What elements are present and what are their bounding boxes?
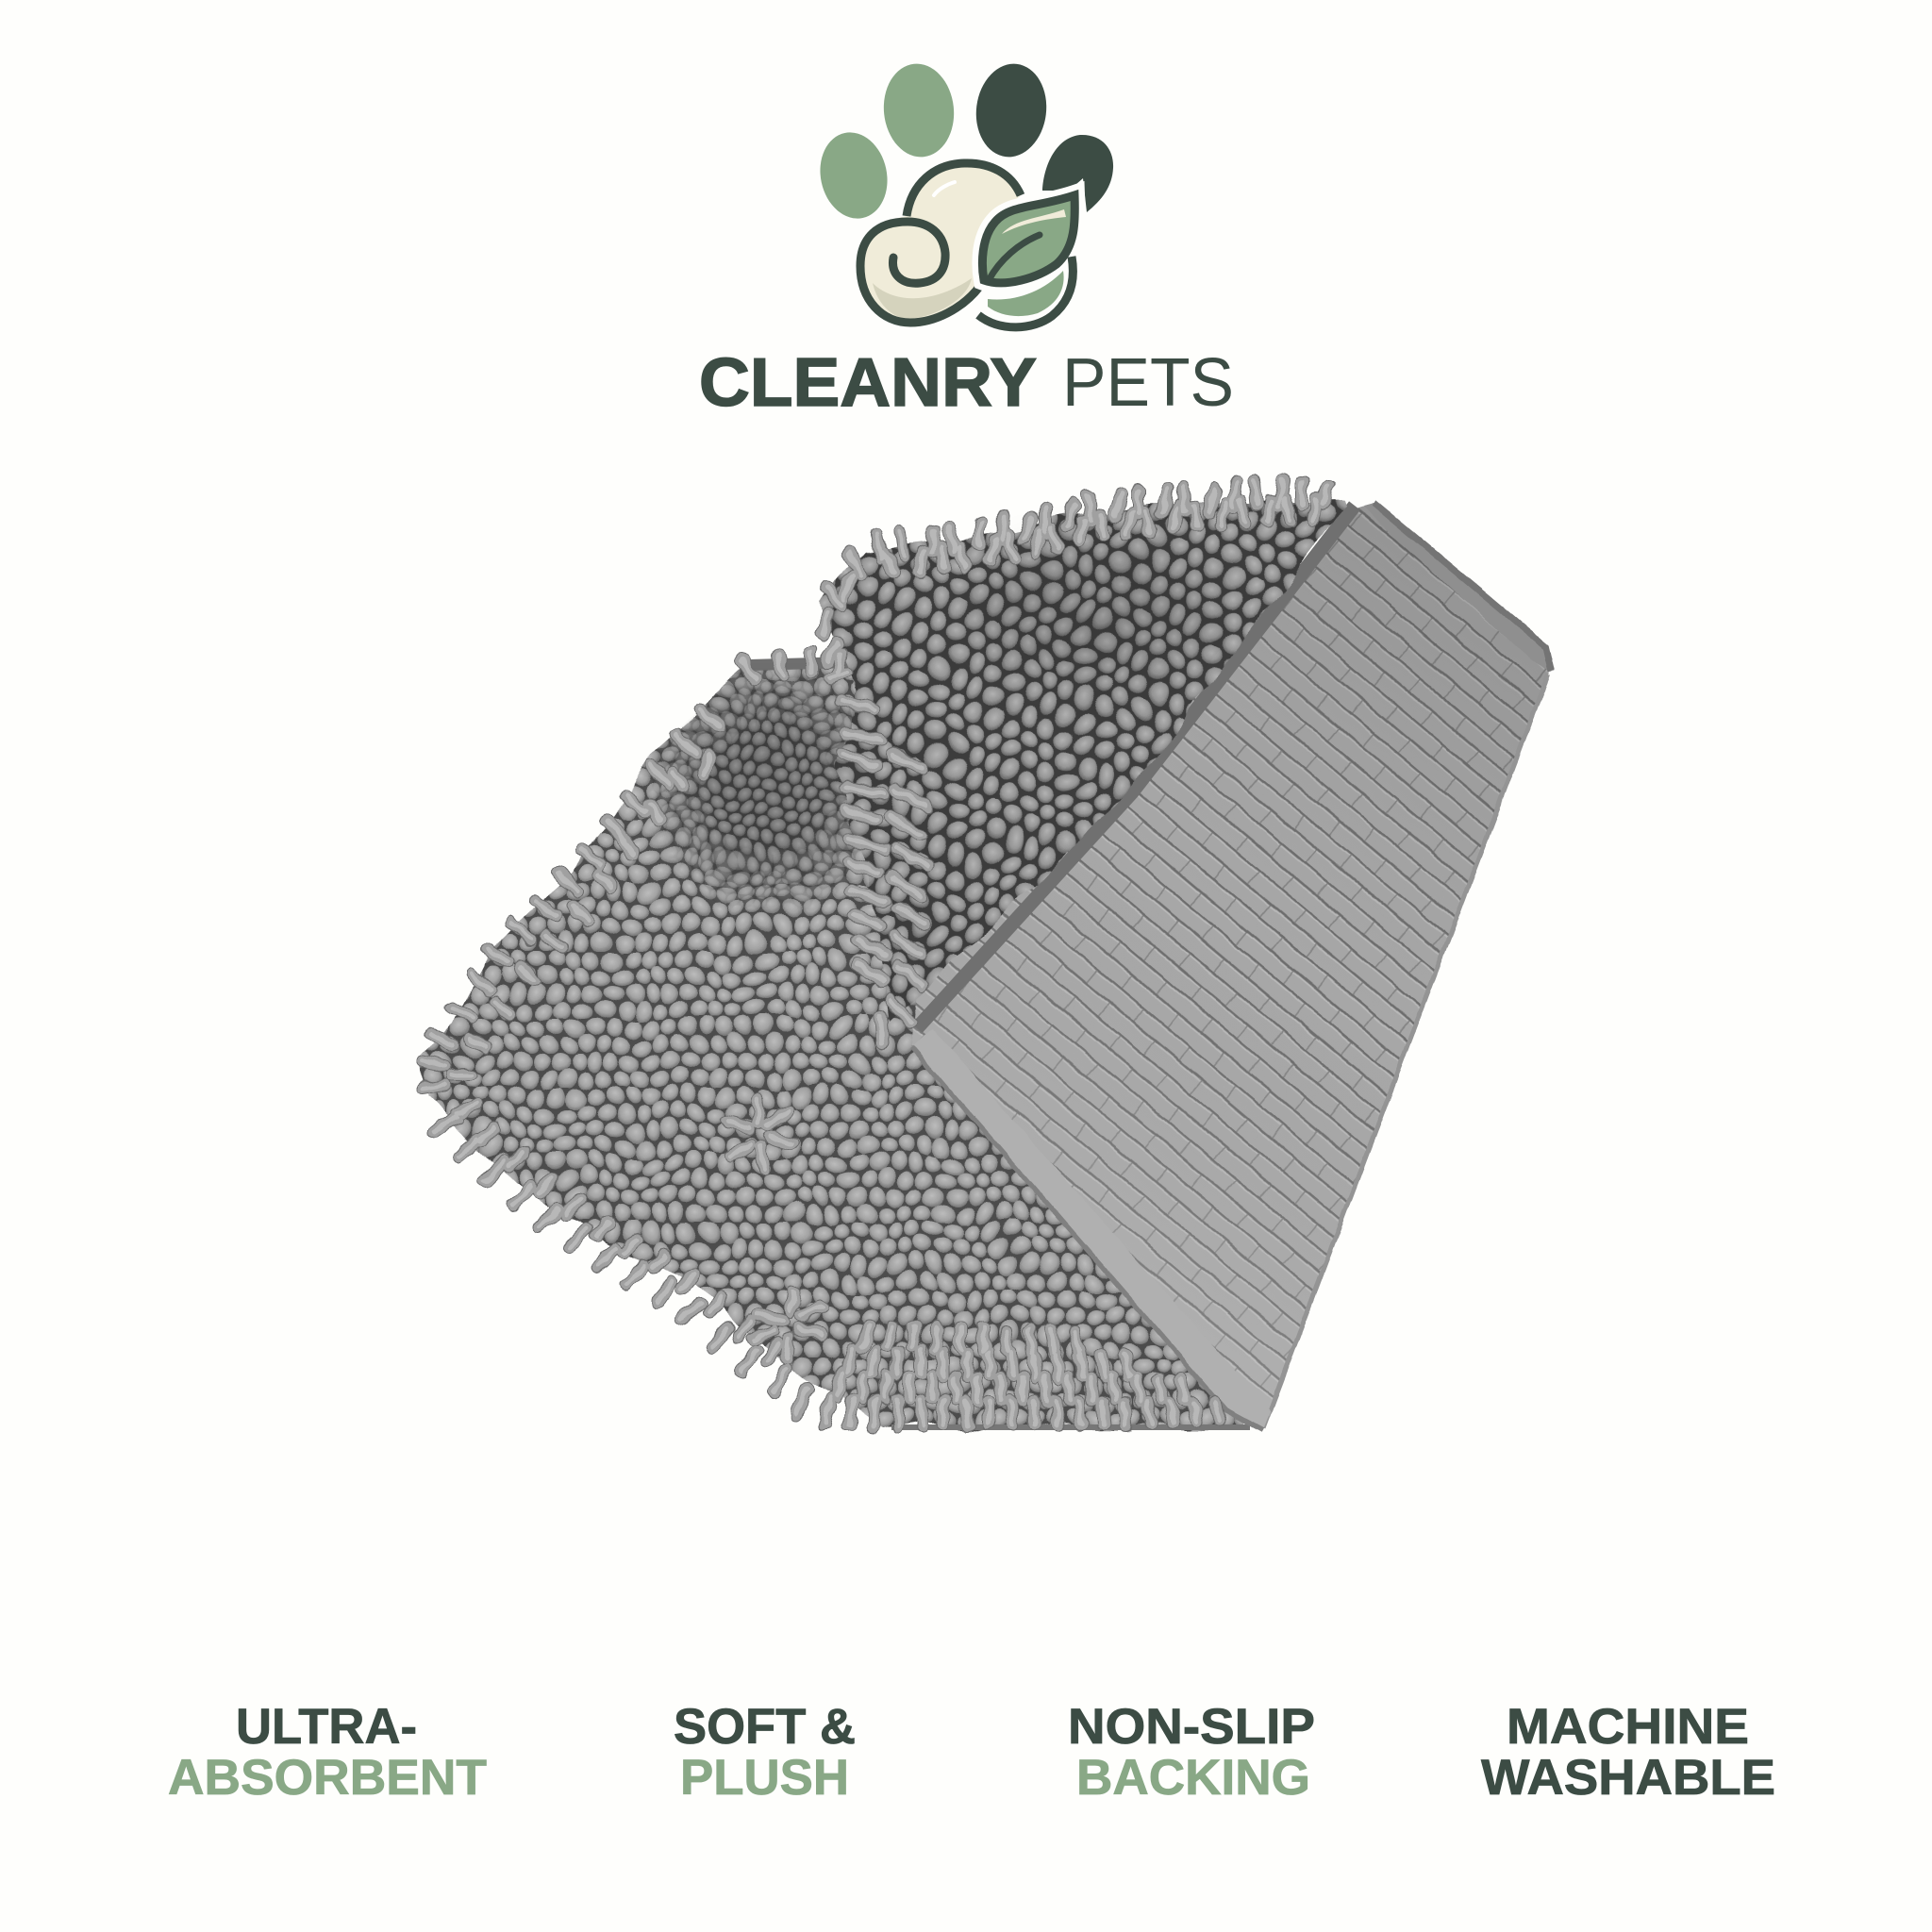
pad shading [873, 278, 972, 319]
bottom hem [891, 1424, 1250, 1430]
main pile texture [423, 663, 1245, 1429]
toe pad 1 [812, 126, 895, 225]
pad outline [907, 163, 1021, 216]
pad highlight [934, 182, 955, 195]
top hem of main pile [750, 662, 849, 665]
leaf halo [982, 195, 1074, 283]
line two: ABSORBENT [168, 1750, 487, 1806]
backing right hem [1263, 675, 1548, 1428]
feature: ultra-absorbent [168, 1699, 487, 1806]
pile shading: dark centre [689, 698, 840, 849]
leaf [982, 195, 1074, 283]
line two: BACKING [1076, 1750, 1310, 1806]
toe pad 4 [1042, 135, 1113, 212]
product: chenille mat [423, 481, 1552, 1430]
line one: MACHINE [1507, 1699, 1749, 1755]
mat: ribbed backing [911, 503, 1552, 1430]
line one: NON-SLIP [1068, 1699, 1315, 1755]
line two: PLUSH [680, 1750, 849, 1806]
fringe strands: body [423, 481, 1328, 1426]
fringe strands [423, 481, 1328, 1426]
swirl outline [860, 222, 980, 323]
pile shading: flap crease [972, 547, 1217, 679]
feature: machine washable [1481, 1699, 1775, 1806]
mat: main shag pile [423, 660, 1245, 1429]
backing lower hem [911, 1028, 1271, 1430]
fringe strands: outline [423, 481, 1328, 1426]
backing top hem [1363, 503, 1552, 672]
pile shading [689, 547, 1217, 849]
brand name: CLEANRY [699, 345, 1037, 421]
leaf upper sliver [1002, 209, 1066, 234]
backing top hem edge [1374, 503, 1552, 672]
icon: paw with soap bubble and leaf [812, 59, 1113, 327]
fold seam [917, 506, 1355, 1028]
lower pad segment [988, 271, 1064, 316]
logo: Cleanry Pets [699, 59, 1234, 421]
fringe strands: highlight [423, 481, 1328, 1426]
mat: folded shag flap [823, 500, 1345, 1023]
line two: WASHABLE [1481, 1750, 1775, 1806]
line one: SOFT & [674, 1699, 856, 1755]
main pad [860, 163, 1021, 323]
backing brick ribs [911, 503, 1550, 1430]
feature: non-slip backing [1068, 1699, 1315, 1806]
lower pad outline [978, 257, 1073, 327]
brand name second word: PETS [1062, 345, 1234, 421]
feature: soft and plush [674, 1699, 856, 1806]
feature labels [168, 1699, 1775, 1806]
toe pad 2 [879, 60, 958, 160]
leaf vein [989, 235, 1040, 280]
recessed pile area [647, 670, 862, 909]
line one: ULTRA- [236, 1699, 417, 1755]
backing lower hem edge [911, 1047, 1263, 1430]
backing light falloff [911, 503, 1550, 1430]
toe pad 3 [971, 59, 1052, 161]
